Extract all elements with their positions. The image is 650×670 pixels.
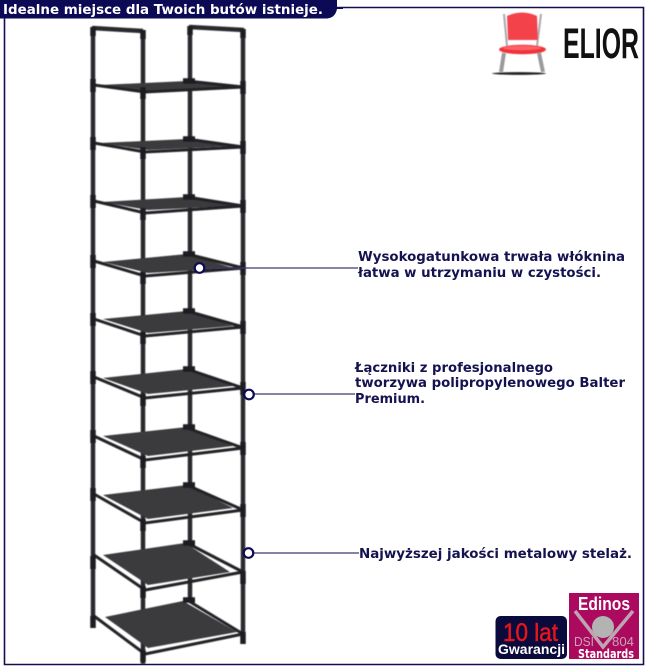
shelf 1 — [93, 79, 243, 99]
shelf 9 — [93, 543, 243, 598]
shoe rack — [92, 26, 244, 664]
badge: 10 year warranty: 10 lat — [503, 619, 558, 647]
callout text: Łączniki z profesjonalnego — [354, 361, 553, 376]
badge: Edinos standards: 804 — [612, 635, 634, 649]
marker dot — [244, 548, 253, 558]
logo: Elior — [492, 12, 639, 75]
shelf 6 — [93, 369, 243, 406]
callout text: Wysokogatunkowa trwała włóknina — [358, 250, 625, 265]
callout text: łatwa w utrzymaniu w czystości. — [357, 266, 601, 281]
rack posts and top rails — [92, 26, 244, 664]
shelf 3 — [93, 195, 243, 220]
callout: frame — [244, 547, 632, 562]
callout: connectors — [244, 361, 626, 407]
icon: red chair — [492, 12, 546, 75]
badge: 10 year warranty: Gwarancji — [498, 642, 565, 657]
badge: 10 year warranty — [496, 616, 567, 659]
marker dot — [195, 263, 204, 273]
shelf 8 — [93, 485, 243, 531]
callout text: tworzywa polipropylenowego Balter — [355, 376, 626, 391]
callout text: Najwyższej jakości metalowy stelaż. — [359, 547, 632, 562]
shelf 2 — [93, 137, 243, 159]
shelf 10 — [93, 600, 243, 662]
badge: Edinos standards: DSI — [574, 635, 594, 649]
shelf 7 — [93, 427, 243, 468]
title banner: Idealne miejsce dla Twoich butów istnieje. — [3, 2, 323, 18]
marker dot — [244, 390, 254, 399]
badge: Edinos standards: Standards — [578, 646, 634, 661]
badge: Edinos standards: Edinos — [578, 593, 630, 614]
badge: Edinos standards — [569, 593, 639, 661]
callout: fabric — [195, 250, 625, 281]
callout text: Premium. — [355, 392, 425, 407]
shelf 5 — [93, 311, 243, 344]
shelf 4 — [93, 254, 243, 284]
